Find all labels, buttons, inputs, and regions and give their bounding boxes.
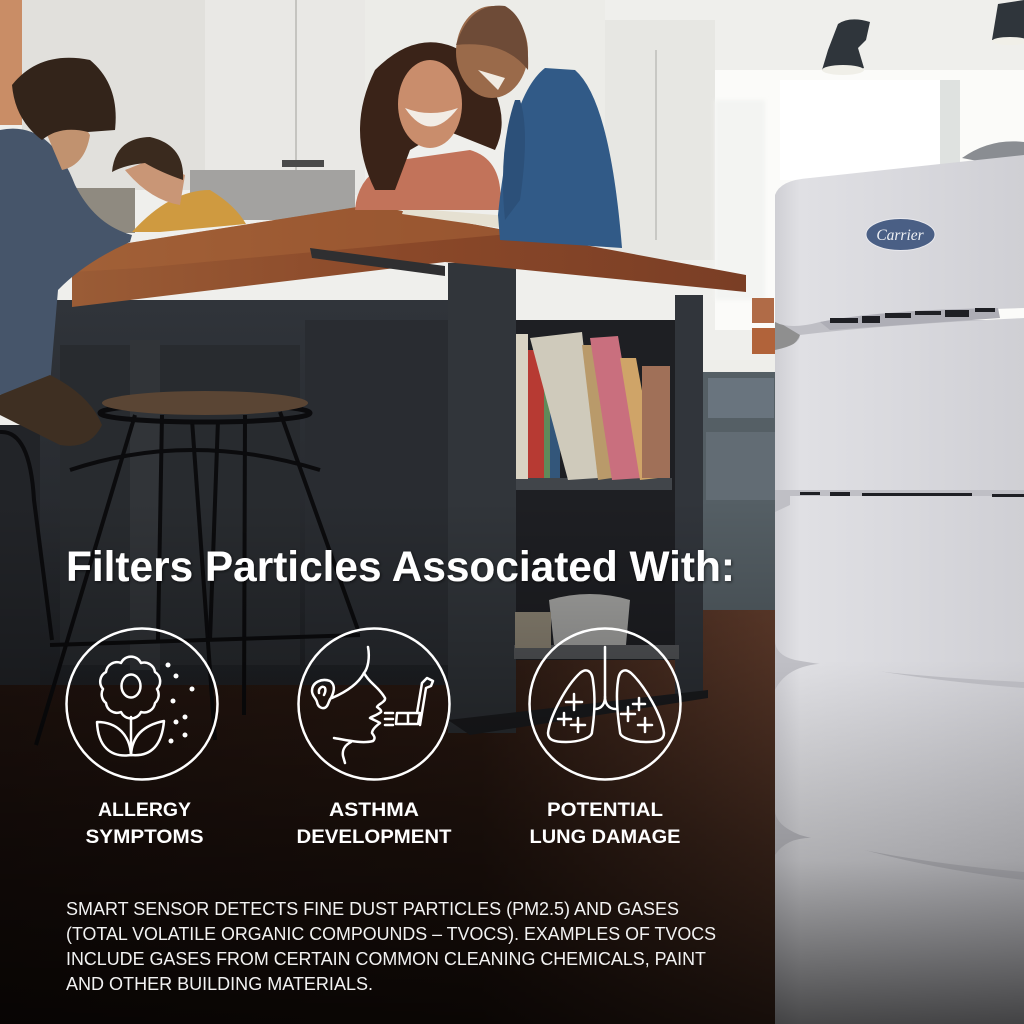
basket on lower shelf [515, 594, 630, 648]
top button [962, 141, 1024, 170]
label: allergy symptoms: SYMPTOMS [86, 826, 204, 848]
purifier body backing [775, 320, 1024, 1024]
description text: INCLUDE GASES FROM CERTAIN COMMON CLEANING CHEMICALS, PAINT [66, 948, 706, 969]
description text: (TOTAL VOLATILE ORGANIC COMPOUNDS – TVOCS). EXAMPLES OF TVOCS [66, 923, 716, 944]
wall lamps [822, 0, 1024, 75]
Carrier logo [866, 218, 935, 250]
description text: AND OTHER BUILDING MATERIALS. [66, 973, 373, 994]
label: asthma development: DEVELOPMENT [296, 826, 452, 848]
label: asthma development: ASTHMA [329, 799, 419, 821]
books [516, 332, 670, 480]
Carrier logo: Carrier [876, 227, 925, 244]
side cabinets [702, 298, 782, 612]
fourth section [775, 664, 1024, 872]
label: potential lung damage [530, 799, 680, 848]
icon: lungs [530, 628, 680, 780]
bright window area [715, 70, 1024, 330]
dark island [0, 263, 708, 735]
label: potential lung damage: LUNG DAMAGE [530, 826, 680, 848]
mid vent band [800, 492, 1024, 497]
bottom section [775, 838, 1024, 1024]
description text: SMART SENSOR DETECTS FINE DUST PARTICLES (PM2.5) AND GASES [66, 898, 679, 919]
floor [0, 610, 800, 1024]
boy left [0, 58, 132, 446]
air purifier [775, 141, 1024, 1024]
title: Filters Particles Associated With: [66, 544, 735, 591]
white upper cabinets [190, 0, 715, 260]
woman [355, 42, 502, 210]
upper vent shadow [820, 308, 1000, 330]
label: allergy symptoms: ALLERGY [98, 799, 191, 821]
top section [775, 155, 1024, 326]
bar stool [0, 391, 360, 745]
label: asthma development [296, 799, 452, 848]
small boy [112, 137, 246, 232]
label: potential lung damage: POTENTIAL [547, 799, 663, 821]
label: allergy symptoms [86, 799, 204, 848]
wood counter top [72, 205, 746, 307]
third section [775, 496, 1024, 682]
second section [775, 318, 1024, 490]
icon: flower with pollen [66, 628, 218, 780]
icon: face with inhaler [298, 628, 450, 780]
man [456, 6, 622, 248]
description text [66, 898, 716, 994]
